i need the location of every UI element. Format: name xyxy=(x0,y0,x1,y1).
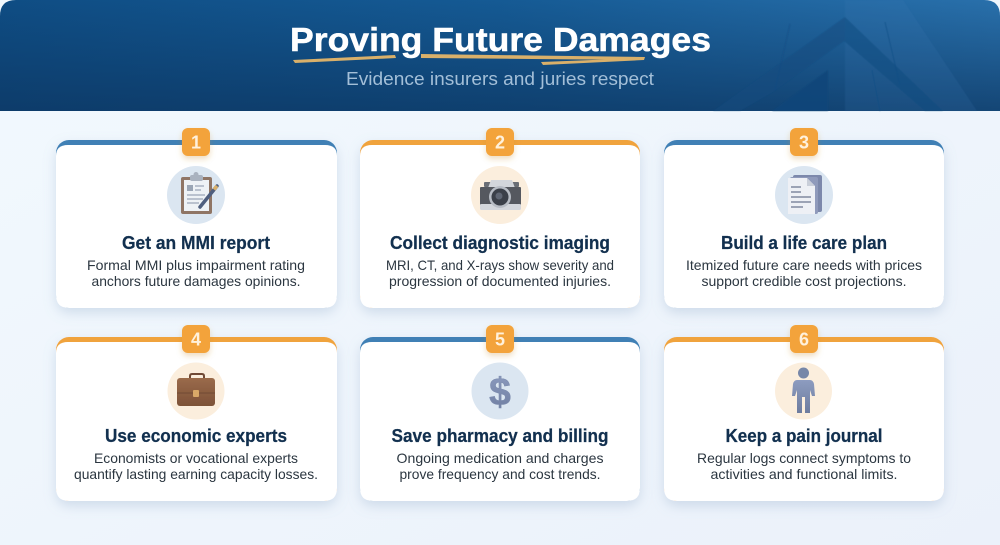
title: Proving Future Damages xyxy=(290,21,711,58)
text block: progression of documented injuries. xyxy=(389,273,611,289)
number badge 5 xyxy=(486,325,514,353)
heading: Save pharmacy and billing xyxy=(392,426,608,446)
text block: Formal MMI plus impairment rating xyxy=(87,257,305,273)
panel: card 4 xyxy=(56,325,337,501)
number badge 2: 2 xyxy=(495,132,505,152)
subtitle: Evidence insurers and juries respect xyxy=(346,69,654,89)
text block xyxy=(697,450,911,482)
number badge 1 xyxy=(182,128,210,156)
number badge 6: 6 xyxy=(799,330,809,350)
text block xyxy=(74,450,318,482)
icon: camera xyxy=(471,166,529,224)
text block xyxy=(396,450,604,482)
panel: card 1 xyxy=(56,128,337,308)
panel: card 2 xyxy=(360,128,640,308)
building illustration xyxy=(713,0,977,111)
text block: Itemized future care needs with prices xyxy=(686,257,922,273)
number badge 3 xyxy=(790,128,818,156)
text block: Economists or vocational experts xyxy=(94,450,298,466)
panel: card 6 xyxy=(664,325,944,501)
number badge 4: 4 xyxy=(191,330,201,350)
heading: Get an MMI report xyxy=(122,233,270,253)
icon: document stack xyxy=(775,166,833,224)
text block xyxy=(87,257,305,289)
header banner xyxy=(0,0,1000,111)
text block xyxy=(386,257,614,289)
text block: Regular logs connect symptoms to xyxy=(697,450,911,466)
heading: Keep a pain journal xyxy=(726,426,882,446)
number badge 3: 3 xyxy=(799,132,809,152)
icon: clipboard report xyxy=(167,166,225,224)
text block: activities and functional limits. xyxy=(710,466,898,482)
icon: dollar sign: $ xyxy=(489,371,511,414)
icon: dollar sign xyxy=(472,362,528,420)
panel: card 3 xyxy=(664,128,944,308)
icon: person xyxy=(775,362,832,420)
number badge 5: 5 xyxy=(495,330,505,350)
text block: prove frequency and cost trends. xyxy=(400,466,600,482)
title underline brush stroke xyxy=(293,54,645,65)
heading: Collect diagnostic imaging xyxy=(390,233,610,253)
number badge 6 xyxy=(790,325,818,353)
panel: card 5 xyxy=(360,325,640,501)
text block: anchors future damages opinions. xyxy=(92,273,300,289)
text block: support credible cost projections. xyxy=(702,273,906,289)
number badge 4 xyxy=(182,325,210,353)
number badge 1: 1 xyxy=(191,132,201,152)
heading: Use economic experts xyxy=(105,426,287,446)
text block: quantify lasting earning capacity losses. xyxy=(74,466,318,482)
text block xyxy=(686,257,922,289)
heading: Build a life care plan xyxy=(721,233,887,253)
number badge 2 xyxy=(486,128,514,156)
icon: briefcase xyxy=(168,362,224,420)
text block: Ongoing medication and charges xyxy=(396,450,604,466)
text block: MRI, CT, and X-rays show severity and xyxy=(386,257,614,273)
